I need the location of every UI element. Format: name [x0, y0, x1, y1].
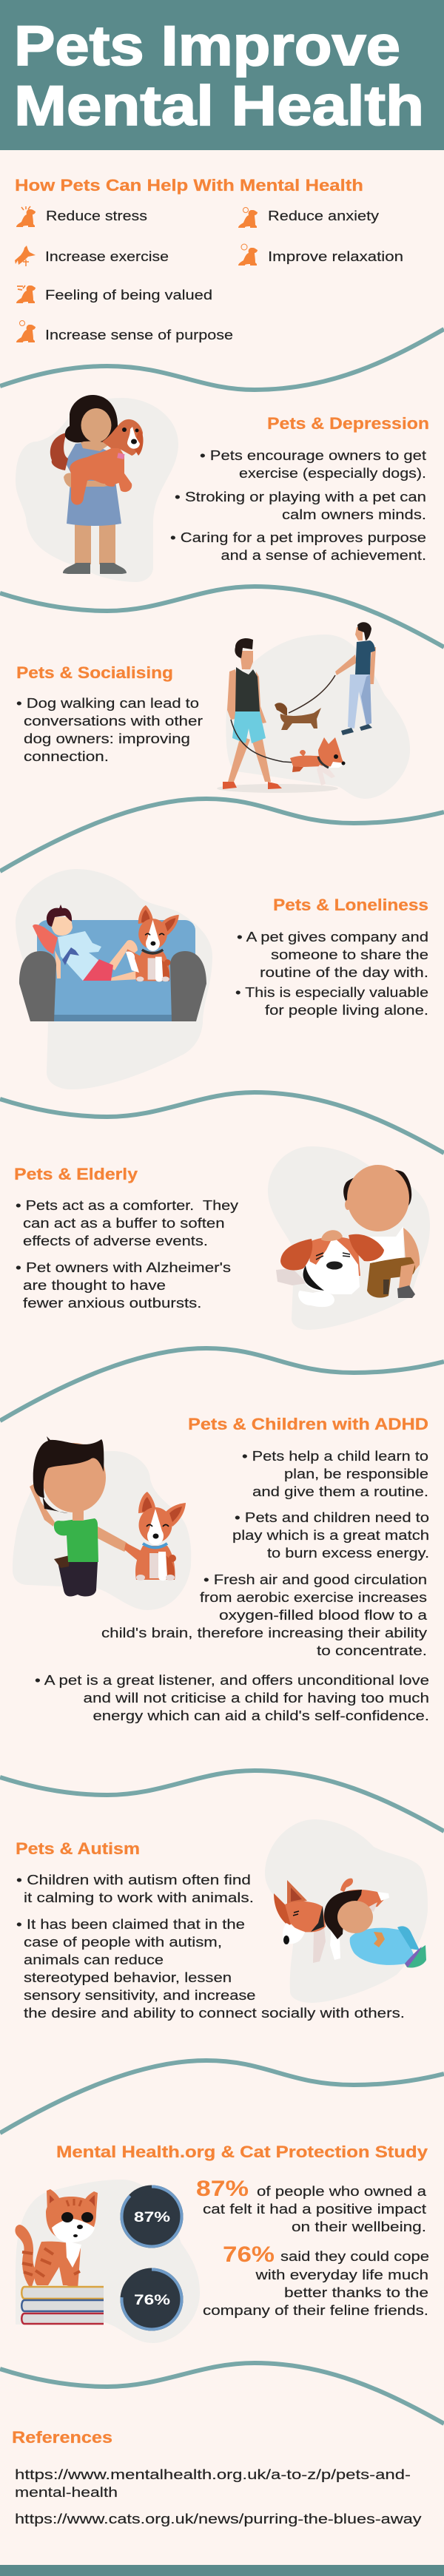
illustration: child hugging dog	[265, 1819, 428, 2003]
footer band	[0, 2565, 444, 2576]
text block: 76 percent finding: with everyday life much	[255, 2268, 428, 2282]
heading: pets and children with ADHD: Pets & Children with ADHD	[188, 1415, 428, 1433]
text block: depression points: • Stroking or playing with a pet can	[175, 490, 426, 504]
text block: socialising point: • Dog walking can lead to	[16, 696, 199, 711]
text block: loneliness points: routine of the day with.	[260, 965, 428, 980]
text block: 87 percent finding: cat felt it had a positive impact	[203, 2202, 426, 2217]
text block: socialising point: connection.	[24, 749, 109, 764]
text block: depression points: calm owners minds.	[282, 507, 426, 522]
heading: pets and socialising: Pets & Socialising	[16, 663, 173, 682]
text block: ADHD points: to burn excess energy.	[267, 1546, 429, 1561]
text block: 76 percent finding: better thanks to the	[284, 2285, 428, 2300]
text block: depression points: • Caring for a pet improves purpose	[170, 530, 426, 545]
illustration: cat on books	[15, 2180, 200, 2343]
illustration: boy and dog shaking hands	[13, 1436, 191, 1610]
text block: elderly points: • Pet owners with Alzheimer's	[16, 1260, 231, 1275]
text block: socialising point	[16, 696, 203, 764]
panel: pets and autism	[16, 1819, 428, 2021]
text block: ADHD points: • Pets and children need to	[235, 1510, 429, 1525]
text block: 87 percent finding	[196, 2177, 427, 2234]
heading: pets and depression: Pets & Depression	[267, 414, 429, 433]
label: reduce anxiety: Reduce anxiety	[268, 209, 379, 223]
text block: ADHD points: • Fresh air and good circulation	[204, 1572, 427, 1587]
text block: loneliness points: • This is especially valuable	[235, 985, 428, 1000]
section: how pets can help	[15, 176, 403, 342]
heading: study: Mental Health.org & Cat Protection Study	[56, 2143, 428, 2161]
text block: ADHD points: • Pets help a child learn to	[242, 1449, 428, 1464]
text block: autism points	[16, 1873, 405, 2021]
text block: socialising point: conversations with other	[24, 714, 203, 728]
panel: pets and children with ADHD	[13, 1415, 429, 1723]
panel: pets and elderly	[14, 1146, 430, 1330]
text block: autism points: stereotyped behavior, lessen	[24, 1970, 232, 1985]
label: improve relaxation: Improve relaxation	[268, 249, 403, 264]
chart: 76 percent donut: 76%	[134, 2293, 170, 2308]
icon: running dog	[15, 246, 36, 266]
illustration: boy on sofa with dog	[16, 869, 212, 1089]
icon: anxious dog	[238, 207, 258, 228]
title: Pets Improve	[14, 15, 400, 78]
heading: references: References	[12, 2428, 112, 2447]
icon: purposeful dog	[16, 321, 36, 342]
panel: pets and depression	[16, 395, 429, 582]
text block: ADHD points: child's brain, therefore increasing their ability	[101, 1626, 427, 1640]
panel: references	[12, 2428, 422, 2526]
text block: ADHD points: and will not criticise a child for having too much	[83, 1691, 429, 1705]
illustration: elderly man petting dog	[268, 1146, 430, 1330]
text block: elderly points: effects of adverse events.	[23, 1234, 208, 1248]
panel: pets and loneliness	[16, 869, 428, 1089]
text block: autism points: the desire and ability to connect socially with others.	[24, 2006, 405, 2021]
chart: 87 percent donut: 87%	[134, 2210, 170, 2225]
text block: reference links	[15, 2467, 422, 2526]
icon: relaxed dog	[238, 244, 258, 266]
label: increase sense of purpose: Increase sense of purpose	[45, 328, 233, 342]
panel: cat protection study	[15, 2143, 429, 2343]
text block: depression points: • Pets encourage owners to get	[200, 448, 426, 463]
text block: reference links: https://www.cats.org.uk/news/purring-the-blues-away	[15, 2512, 422, 2526]
text block: loneliness points: someone to share the	[271, 947, 428, 962]
header band	[0, 0, 444, 150]
text block: reference links: https://www.mentalhealth.org.uk/a-to-z/p/pets-and-	[15, 2467, 411, 2482]
text block: loneliness points: for people living alone.	[265, 1003, 428, 1018]
text block: 76 percent finding	[203, 2242, 429, 2318]
text block: ADHD points: plan, be responsible	[284, 1467, 428, 1481]
text block: ADHD points: energy which can aid a child's self-confidence.	[93, 1708, 429, 1723]
text block: ADHD points: play which is a great match	[232, 1528, 429, 1543]
label: increase exercise: Increase exercise	[45, 249, 169, 264]
icon: stressed dog	[16, 206, 36, 227]
chart: 87 percent donut	[120, 2185, 184, 2248]
text block: 76 percent finding: said they could cope	[280, 2249, 429, 2264]
text block: ADHD points: and give them a routine.	[252, 1484, 428, 1499]
text block: loneliness points: • A pet gives company and	[237, 930, 428, 944]
text block: autism points: it calming to work with animals.	[24, 1890, 254, 1905]
text block: elderly points: are thought to have	[23, 1278, 166, 1293]
text block: depression points	[170, 448, 426, 563]
illustration: two people walking dogs	[217, 622, 410, 799]
text block: elderly points	[16, 1198, 238, 1311]
text block: 76 percent finding: company of their feline friends.	[203, 2303, 428, 2318]
text block: autism points: • It has been claimed that in the	[16, 1917, 245, 1932]
text block: depression points: exercise (especially dogs).	[239, 466, 426, 481]
heading: pets and autism: Pets & Autism	[16, 1839, 140, 1858]
heading: how pets can help: How Pets Can Help With Mental Health	[15, 176, 363, 195]
label: feeling of being valued: Feeling of being valued	[45, 288, 212, 302]
text block: 87 percent finding: of people who owned a	[257, 2184, 427, 2199]
chart: 76 percent donut	[120, 2268, 184, 2331]
text block: autism points: case of people with autism,	[24, 1935, 222, 1950]
text block: elderly points: • Pets act as a comforter. They	[16, 1198, 238, 1213]
text block: autism points: sensory sensitivity, and increase	[24, 1988, 256, 2003]
text block: socialising point: dog owners: improving	[24, 731, 190, 746]
text block: elderly points: can act as a buffer to soften	[23, 1216, 225, 1231]
text block: autism points: • Children with autism often find	[16, 1873, 251, 1887]
text block: 87 percent finding: 87%	[196, 2177, 249, 2201]
text block: depression points: and a sense of achievement.	[221, 548, 426, 563]
icon: valued dog	[16, 285, 36, 303]
text block: ADHD points	[35, 1449, 429, 1723]
text block: 76 percent finding: 76%	[223, 2242, 275, 2267]
text block: ADHD points: • A pet is a great listener, and offers unconditional love	[35, 1673, 429, 1688]
heading: pets and loneliness: Pets & Loneliness	[273, 896, 428, 914]
illustration: girl holding dog	[16, 395, 178, 582]
heading: pets and elderly: Pets & Elderly	[14, 1165, 138, 1183]
label: reduce stress: Reduce stress	[46, 209, 147, 223]
text block: reference links: mental-health	[15, 2485, 118, 2500]
text block: ADHD points: oxygen-filled blood flow to a	[219, 1608, 428, 1623]
panel: pets and socialising	[16, 622, 410, 799]
text block: ADHD points: to concentrate.	[317, 1643, 427, 1658]
title	[14, 15, 424, 138]
text block: elderly points: fewer anxious outbursts.	[23, 1296, 201, 1311]
text block: ADHD points: from aerobic exercise increases	[200, 1590, 427, 1605]
text block: autism points: animals can reduce	[24, 1953, 164, 1967]
text block: loneliness points	[235, 930, 428, 1018]
text block: 87 percent finding: on their wellbeing.	[292, 2220, 426, 2234]
title: Mental Health	[14, 75, 424, 138]
